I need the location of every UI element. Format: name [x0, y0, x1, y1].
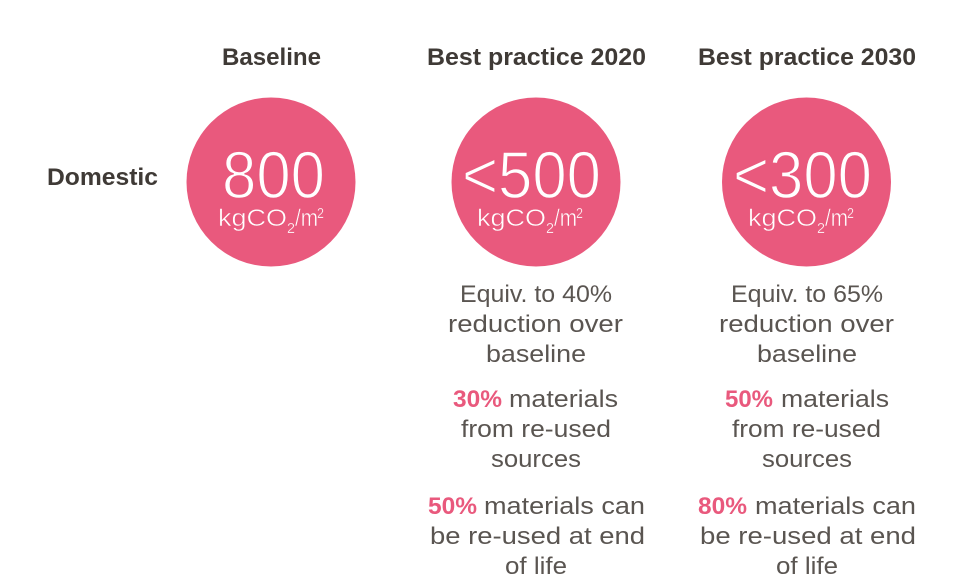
text block: 2020 re-used at end of life: [428, 493, 645, 580]
text block: 2030 reduction over baseline: [719, 281, 894, 368]
text block: 2020 re-used at end of life: 50%: [428, 493, 477, 520]
badge: baseline 800 kgCO2/m2: kgCO: [218, 205, 287, 232]
heading: Best practice 2030: Best practice 2030: [698, 44, 916, 71]
text block: 2020 re-used at end of life: of life: [505, 553, 567, 580]
text block: 2020 reduction over baseline: Equiv. to 40%: [460, 281, 612, 308]
text block: 2030 reduction over baseline: reduction over: [719, 311, 894, 338]
text block: 2020 re-used sources: [453, 386, 618, 473]
text block: 2030 re-used sources: from re-used: [732, 416, 881, 443]
text block: 2030 re-used at end of life: of life: [776, 553, 838, 580]
text block: 2030 re-used at end of life: be re-used at end: [700, 523, 916, 550]
text block: 2030 re-used at end of life: materials can: [755, 493, 916, 520]
row label: Domestic: Domestic: [47, 164, 158, 191]
text block: 2030 re-used sources: [725, 386, 889, 473]
text block: 2020 re-used sources: from re-used: [461, 416, 611, 443]
badge: baseline 800 kgCO2/m2: 2: [317, 205, 324, 222]
badge: best practice 2020 under 500 kgCO2/m2: 2: [576, 205, 583, 222]
text block: 2030 re-used at end of life: 80%: [698, 493, 747, 520]
badge: best practice 2030 under 300 kgCO2/m2: 2: [847, 205, 854, 222]
text block: 2030 re-used sources: materials: [781, 386, 889, 413]
badge: best practice 2020 under 500 kgCO2/m2: /m: [554, 205, 577, 232]
badge: best practice 2030 under 300 kgCO2/m2: /m: [825, 205, 848, 232]
badge: best practice 2030 under 300 kgCO2/m2: 2: [817, 220, 825, 237]
text block: 2030 reduction over baseline: Equiv. to 65%: [731, 281, 883, 308]
text block: 2020 reduction over baseline: [448, 281, 623, 368]
text block: 2020 re-used sources: materials: [509, 386, 618, 413]
text block: 2020 reduction over baseline: baseline: [486, 341, 586, 368]
text block: 2030 re-used sources: 50%: [725, 386, 773, 413]
badge: best practice 2020 under 500 kgCO2/m2: kgCO: [477, 205, 546, 232]
text block: 2020 re-used sources: sources: [491, 446, 581, 473]
badge: best practice 2030 under 300 kgCO2/m2: kgCO: [748, 205, 817, 232]
text block: 2030 re-used at end of life: [698, 493, 916, 580]
badge: best practice 2030 under 300 kgCO2/m2: [722, 98, 891, 266]
badge: best practice 2020 under 500 kgCO2/m2: 2: [546, 220, 554, 237]
heading: Baseline: Baseline: [222, 44, 321, 71]
badge: baseline 800 kgCO2/m2: /m: [295, 205, 318, 232]
text block: 2020 re-used sources: 30%: [453, 386, 502, 413]
badge: best practice 2020 under 500 kgCO2/m2: [452, 98, 620, 266]
badge: best practice 2020 under 500 kgCO2/m2: <500: [462, 138, 601, 213]
badge: baseline 800 kgCO2/m2: 800: [222, 138, 325, 213]
text block: 2030 reduction over baseline: baseline: [757, 341, 857, 368]
text block: 2020 re-used at end of life: materials can: [484, 493, 645, 520]
badge: baseline 800 kgCO2/m2: 2: [287, 220, 295, 237]
text block: 2020 reduction over baseline: reduction over: [448, 311, 623, 338]
badge: baseline 800 kgCO2/m2: [186, 98, 356, 266]
badge: best practice 2030 under 300 kgCO2/m2: <300: [733, 138, 872, 213]
text block: 2020 re-used at end of life: be re-used at end: [430, 523, 645, 550]
heading: Best practice 2020: Best practice 2020: [427, 44, 646, 71]
text block: 2030 re-used sources: sources: [762, 446, 852, 473]
